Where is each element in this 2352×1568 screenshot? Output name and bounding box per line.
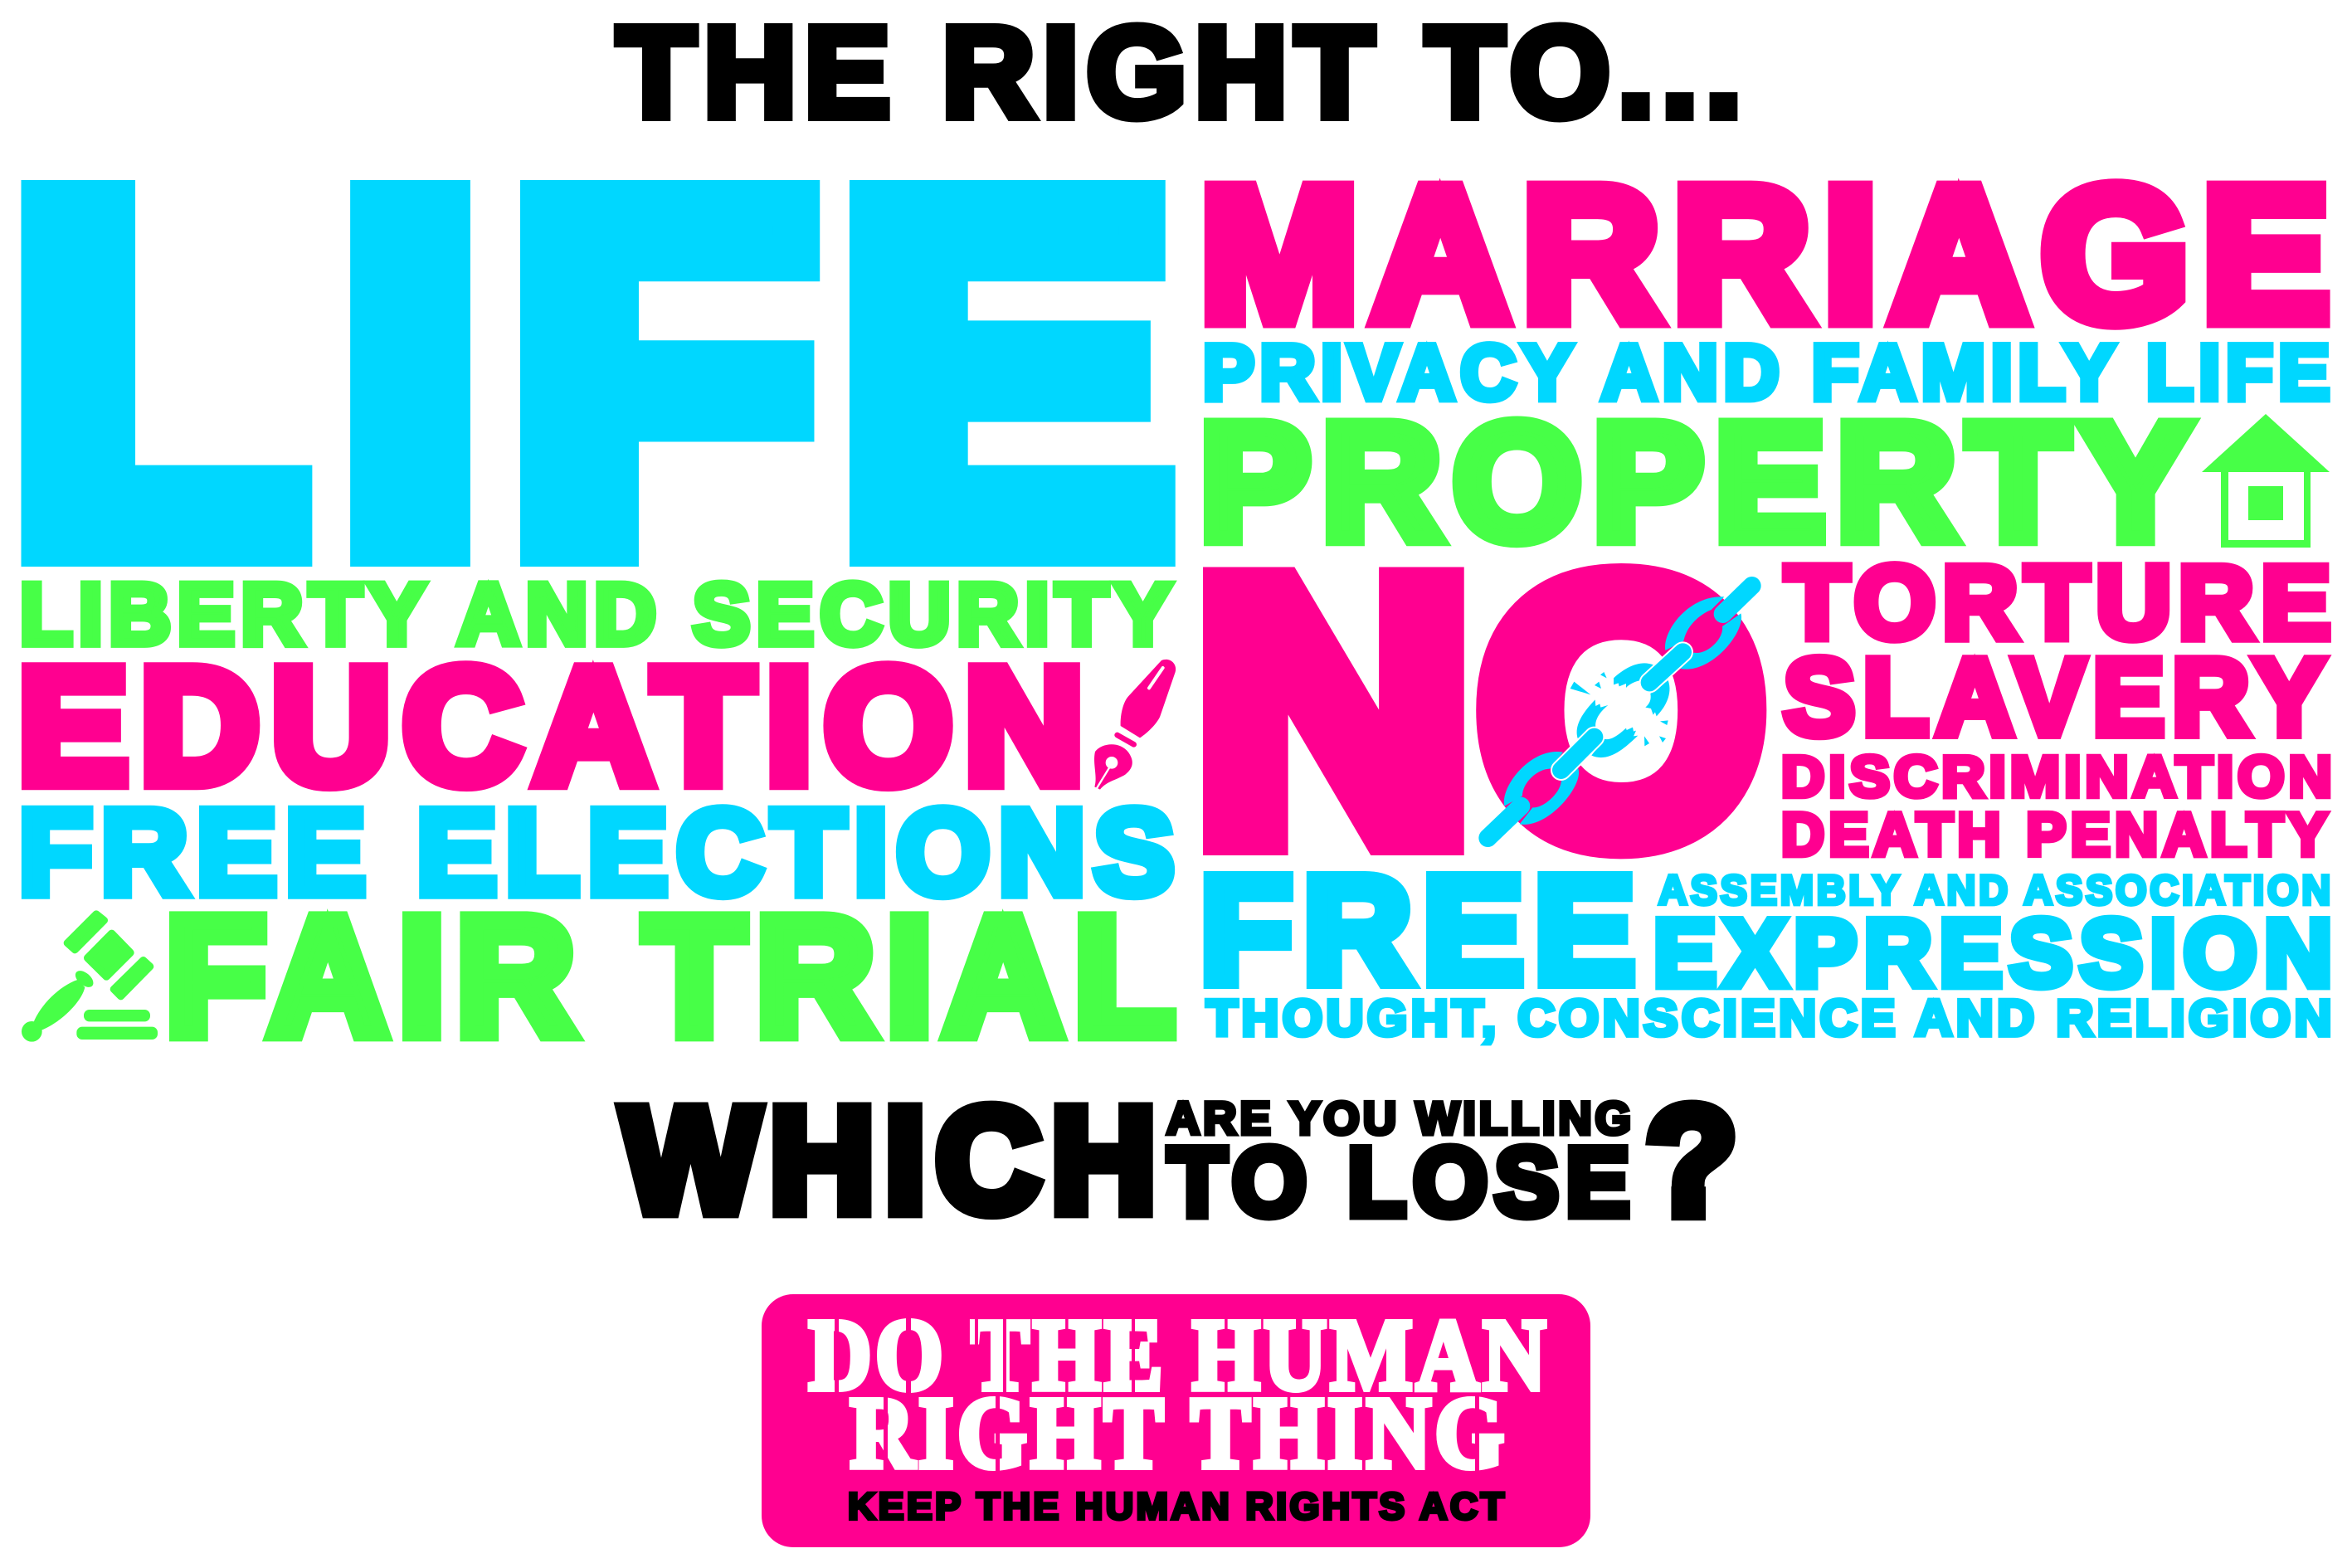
title: THE RIGHT TO... <box>617 1 1750 144</box>
icon: house <box>2202 414 2330 548</box>
panel: left column of rights <box>12 96 1186 1069</box>
heading: LIFE: I <box>340 96 480 649</box>
text: to lose: TO LOSE <box>1168 1127 1637 1236</box>
text: thought, conscience and religion: THOUGHT, CONSCIENCE AND RELIGION <box>1206 990 2335 1047</box>
text: slavery: SLAVERY <box>1784 636 2333 757</box>
heading: LIFE: E <box>840 96 1171 649</box>
icon: gavel <box>22 914 158 1042</box>
heading: LIFE: F <box>510 96 815 649</box>
icon: broken chain <box>1488 586 1752 838</box>
text: question mark: ? <box>1646 1076 1737 1247</box>
question: which are you willing to lose <box>622 1076 1737 1247</box>
panel: right column of rights <box>1195 149 2343 1047</box>
text: marriage: MARRIAGE <box>1200 149 2343 360</box>
text: assembly and association: ASSEMBLY AND ASSOCIATION <box>1658 867 2334 913</box>
slogan: right thing: RIGHT THING <box>850 1377 1508 1489</box>
text: free: FREE <box>1200 846 1646 1014</box>
text: education: EDUCATION <box>18 635 1096 817</box>
text: are you willing: ARE YOU WILLING <box>1166 1092 1634 1144</box>
icon: fountain pen <box>1094 660 1176 790</box>
text: death penalty: DEATH PENALTY <box>1781 801 2332 869</box>
heading: NO with broken chain: N <box>1195 505 1472 917</box>
text: torture: TORTURE <box>1785 546 2338 660</box>
text: keep the human rights act: KEEP THE HUMAN RIGHTS ACT <box>848 1485 1507 1527</box>
slogan: do the human: DO THE HUMAN <box>809 1299 1550 1411</box>
text: which: WHICH <box>622 1077 1166 1243</box>
heading: NO with broken chain: O <box>1478 505 1765 917</box>
text: privacy and family life: PRIVACY AND FAMILY LIFE <box>1203 329 2335 416</box>
text: liberty and security: LIBERTY AND SECURITY <box>20 566 1178 662</box>
heading: LIFE: L <box>12 96 304 649</box>
text: discrimination: DISCRIMINATION <box>1781 744 2336 809</box>
text: fair trial: FAIR TRIAL <box>166 883 1186 1069</box>
text: free elections: FREE ELECTIONS <box>19 785 1183 919</box>
heading: NO with broken chain <box>1195 505 1765 917</box>
text: expression: EXPRESSION <box>1653 901 2340 1006</box>
text: property: PROPERTY <box>1200 390 2203 573</box>
heading: LIFE <box>12 96 1171 649</box>
callout: campaign badge <box>762 1294 1590 1547</box>
